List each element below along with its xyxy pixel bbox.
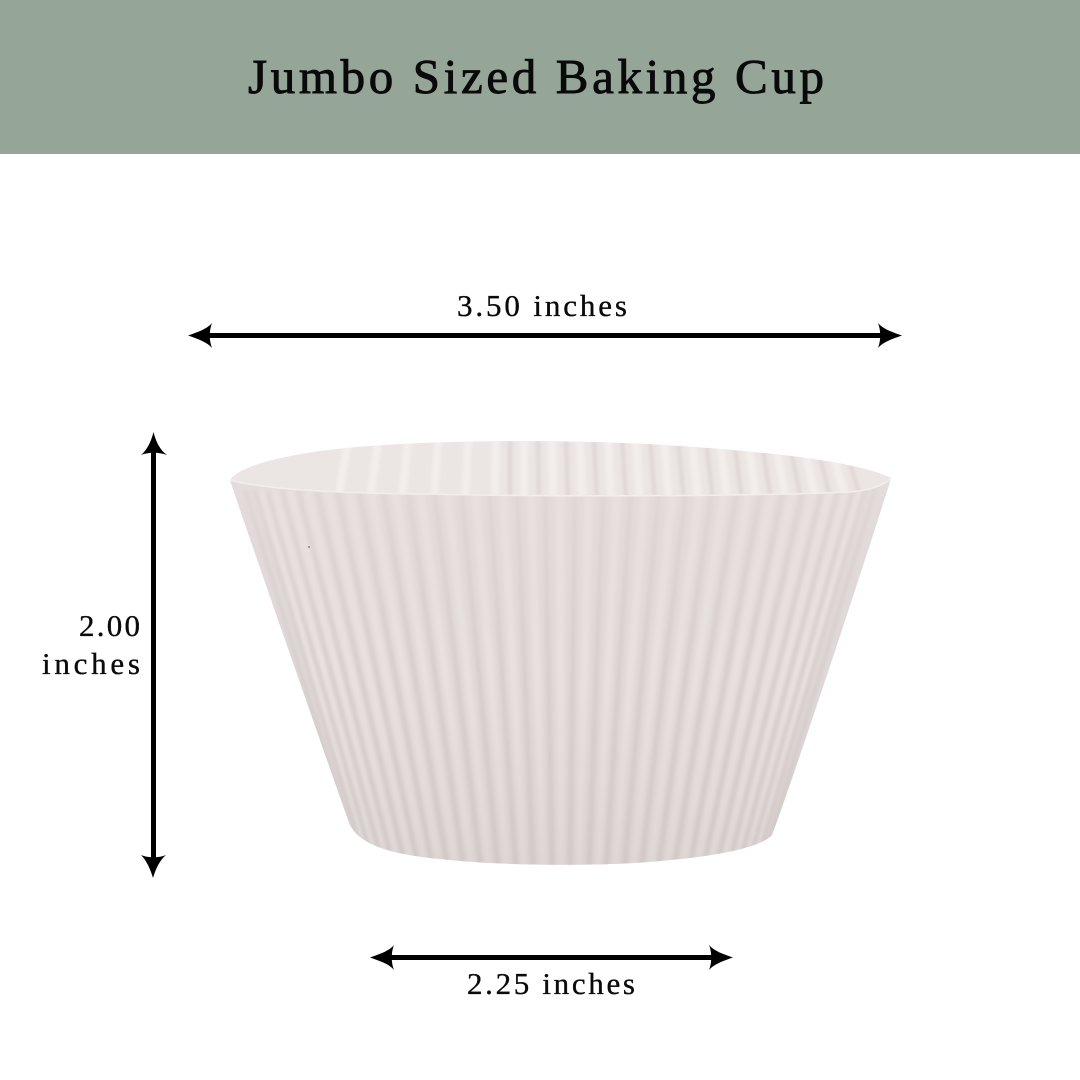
- height label: 2.00: [79, 608, 140, 643]
- cup interior: [230, 441, 890, 495]
- height label: [42, 608, 140, 681]
- bottom width label: 2.25 inches: [467, 966, 635, 1001]
- top width arrow: [188, 323, 902, 348]
- cup rim highlight: [230, 478, 891, 496]
- top width label: 3.50 inches: [457, 288, 627, 323]
- height label: inches: [42, 646, 140, 681]
- bottom width arrow: [370, 945, 733, 970]
- height arrow: [141, 432, 167, 878]
- header banner: [0, 0, 1080, 154]
- title: Jumbo Sized Baking Cup: [248, 49, 824, 104]
- cup outer wall with pleats: [225, 470, 895, 870]
- baking cup photo: [225, 435, 895, 870]
- speck on cup: [308, 546, 310, 548]
